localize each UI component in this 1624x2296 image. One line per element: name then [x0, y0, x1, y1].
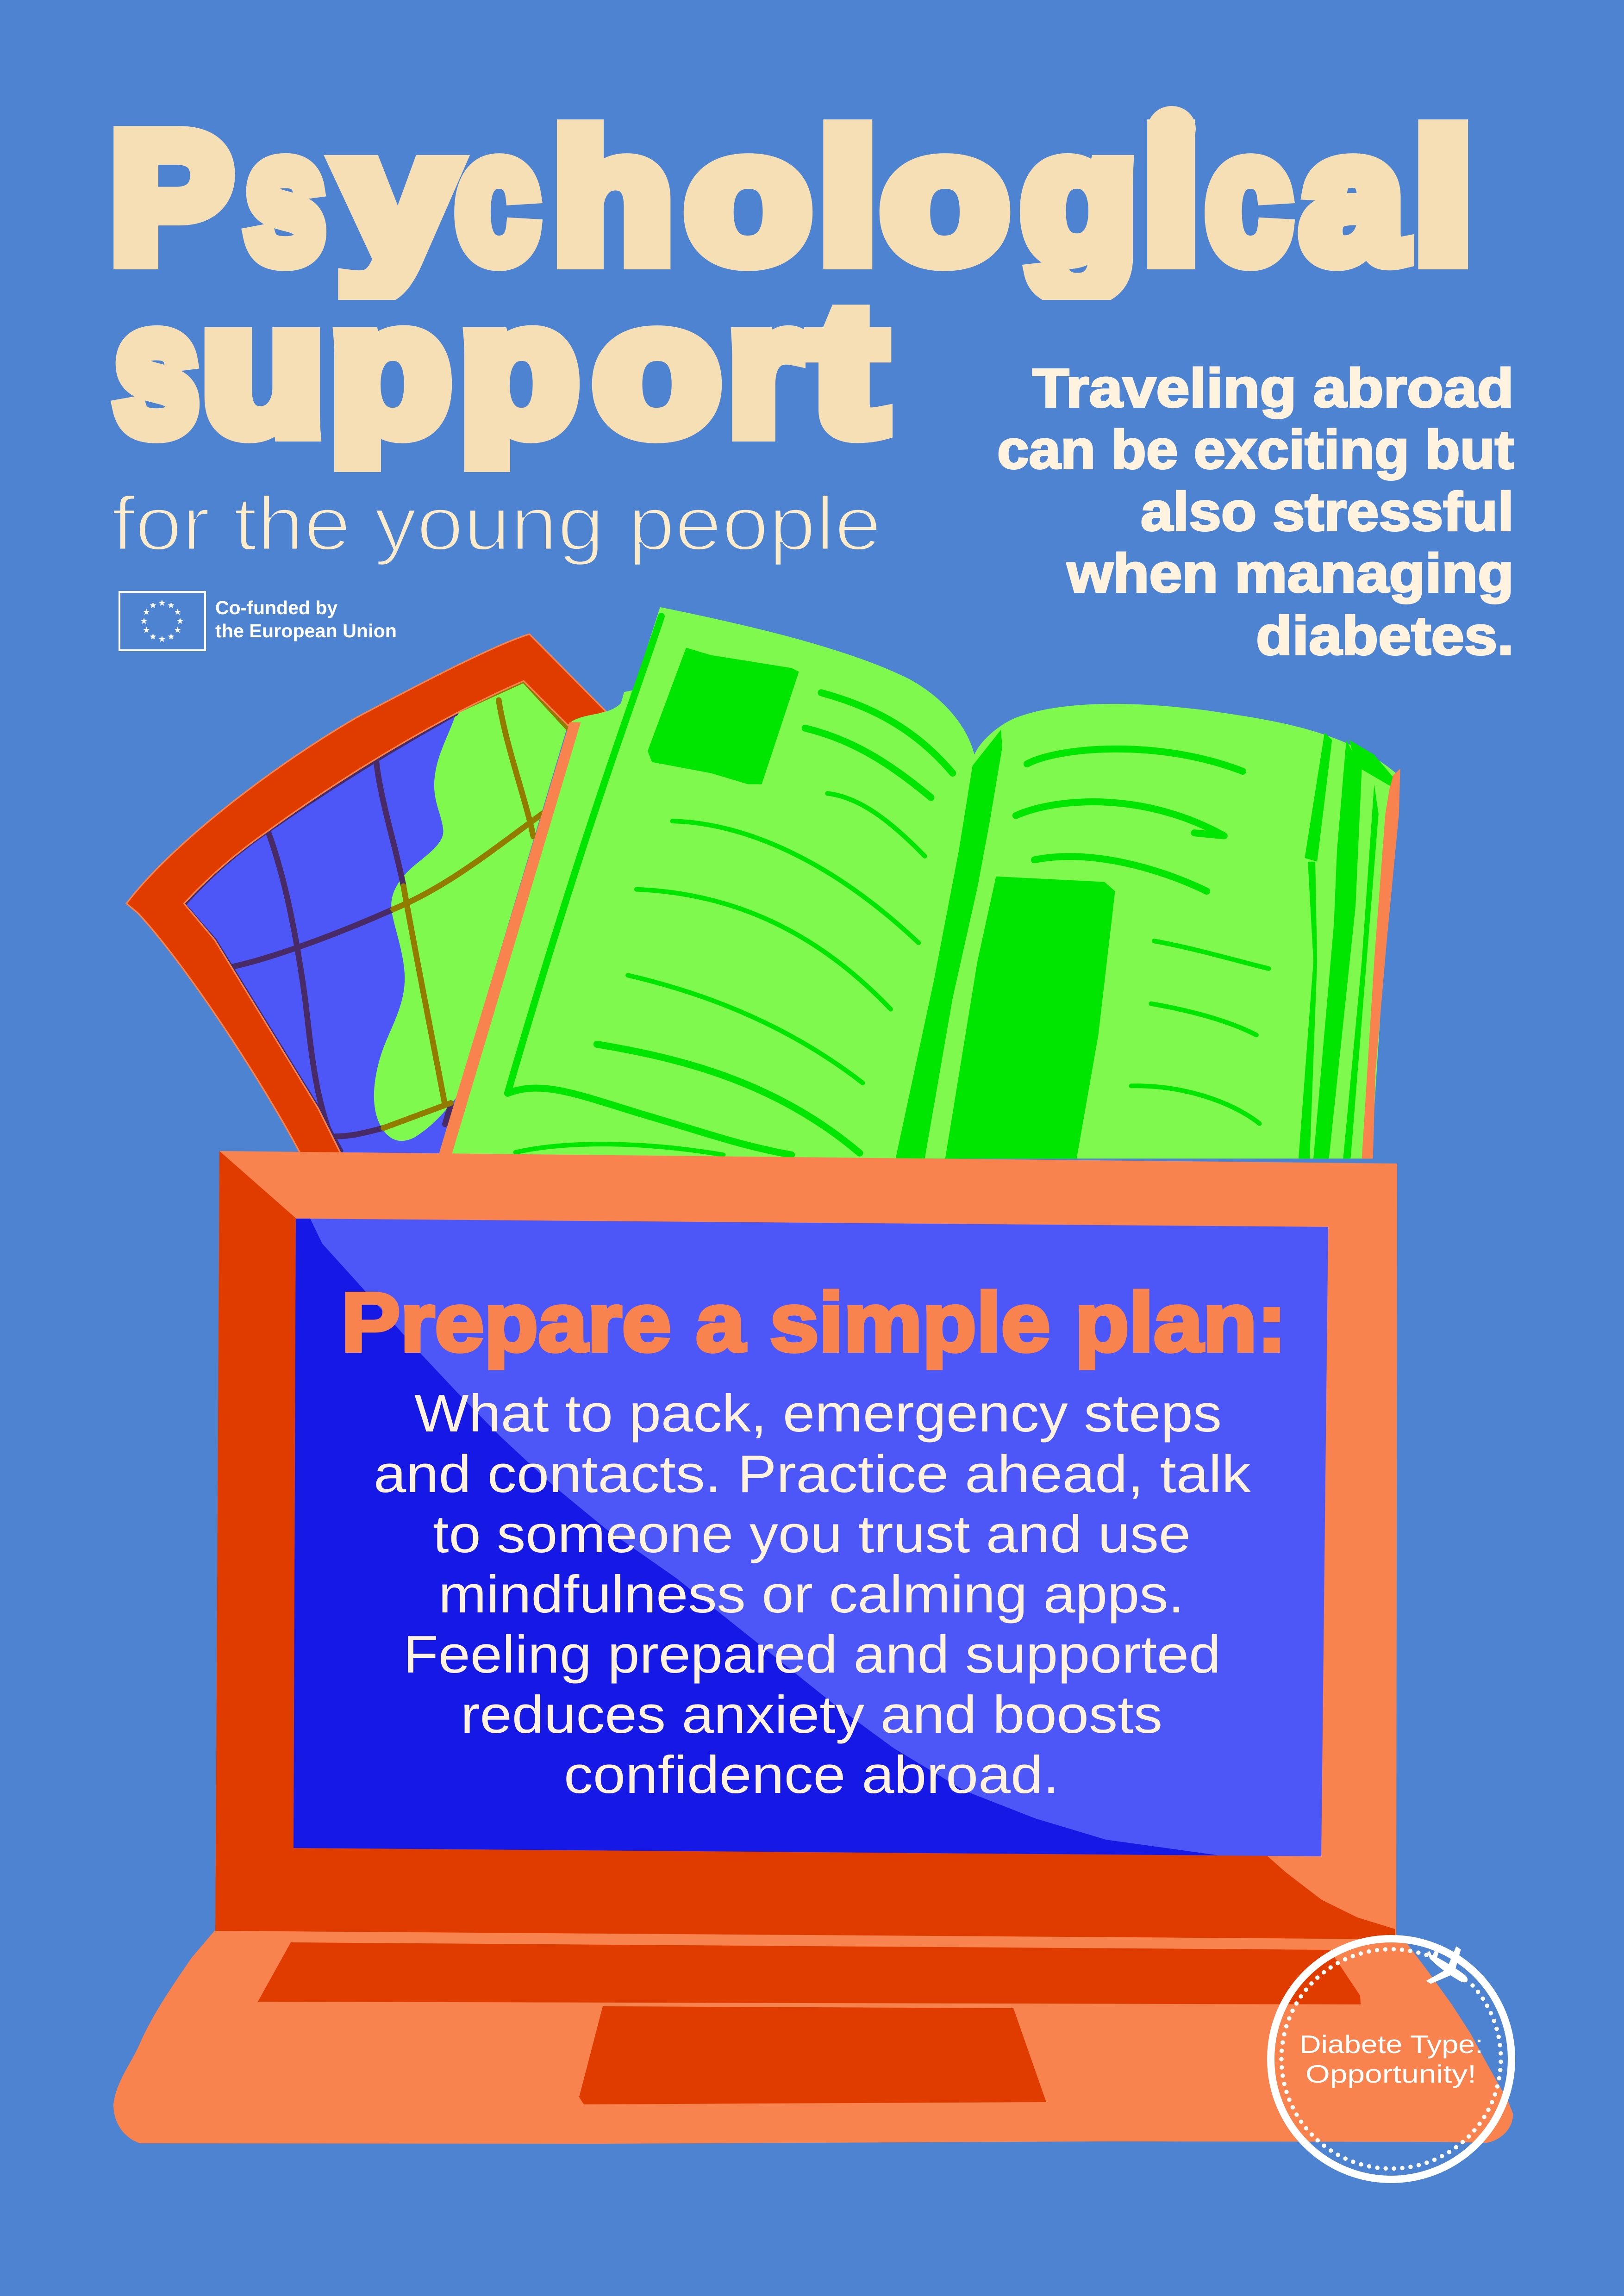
book left cover edge — [437, 722, 581, 1158]
intro text block — [997, 358, 1514, 666]
lid shadow — [215, 1151, 1395, 1939]
title: c — [1206, 96, 1291, 299]
badge: Diabete Type: Opportunity!: Diabete Type: — [1299, 2030, 1483, 2059]
screen body text: reduces anxiety and boosts — [461, 1686, 1162, 1744]
title: t — [812, 268, 884, 471]
title: o — [882, 96, 1008, 299]
title: l — [1414, 96, 1472, 299]
central spine band — [896, 729, 1002, 1158]
EU co-funding logo: the European Union — [215, 620, 397, 641]
screen body text: to someone you trust and use — [433, 1505, 1191, 1564]
laptop base — [113, 1930, 1513, 2144]
subtitle: for the young people — [112, 481, 881, 566]
title: i — [1143, 96, 1199, 299]
trackpad — [579, 2006, 1046, 2104]
title: y — [338, 96, 457, 300]
intro text block: diabetes. — [1256, 605, 1514, 666]
title: s — [245, 96, 325, 299]
keyboard — [258, 1942, 1361, 2004]
EU co-funding logo: Co-funded by — [215, 597, 337, 618]
screen — [294, 1219, 1328, 1856]
left page image block — [648, 648, 799, 784]
title: P — [111, 96, 232, 299]
screen shadow — [294, 1219, 1219, 1855]
screen body text — [374, 1384, 1251, 1804]
intro text block: can be exciting but — [997, 419, 1514, 480]
title: p — [461, 268, 578, 472]
map water — [184, 681, 568, 1159]
book pages — [444, 607, 1396, 1158]
title: o — [594, 268, 719, 471]
right page image block — [945, 877, 1115, 1158]
intro text block: when managing — [1067, 543, 1514, 604]
left page spine line — [507, 616, 792, 1155]
screen body text: mindfulness or calming apps. — [438, 1565, 1184, 1624]
right page text strokes — [1016, 749, 1269, 1124]
title: s — [115, 268, 198, 471]
title: u — [202, 268, 324, 471]
map red frame — [126, 634, 606, 1155]
title: a — [1302, 96, 1405, 299]
screen heading: Prepare a simple plan: — [341, 1276, 1287, 1369]
intro text block: Traveling abroad — [1032, 358, 1514, 419]
page edge stripes — [1299, 733, 1393, 1158]
icon: airplane — [1414, 1935, 1480, 2000]
screen body text: and contacts. Practice ahead, talk — [374, 1445, 1251, 1504]
intro text block: also stressful — [1141, 481, 1514, 542]
title — [111, 96, 1472, 472]
title: c — [456, 96, 538, 299]
map grid lines — [184, 681, 568, 1151]
screen body text: Feeling prepared and supported — [403, 1625, 1221, 1684]
badge: Diabete Type: Opportunity!: Opportunity! — [1305, 2060, 1476, 2088]
title: o — [686, 96, 810, 299]
map illustration — [126, 634, 606, 1159]
title: p — [331, 268, 450, 472]
badge: Diabete Type: Opportunity! — [1271, 1935, 1512, 2179]
title: h — [553, 96, 673, 299]
screen body text: What to pack, emergency steps — [414, 1384, 1222, 1443]
title: g — [1022, 96, 1137, 300]
book right cover edge — [1362, 769, 1400, 1158]
open book illustration — [437, 607, 1400, 1158]
title: l — [819, 96, 876, 299]
EU co-funding logo — [119, 592, 397, 650]
laptop lid — [215, 1151, 1397, 1939]
map land — [374, 681, 568, 1141]
laptop — [113, 1151, 1513, 2144]
title: r — [729, 268, 799, 471]
left page text strokes — [516, 693, 953, 1155]
screen body text: confidence abroad. — [564, 1746, 1059, 1804]
